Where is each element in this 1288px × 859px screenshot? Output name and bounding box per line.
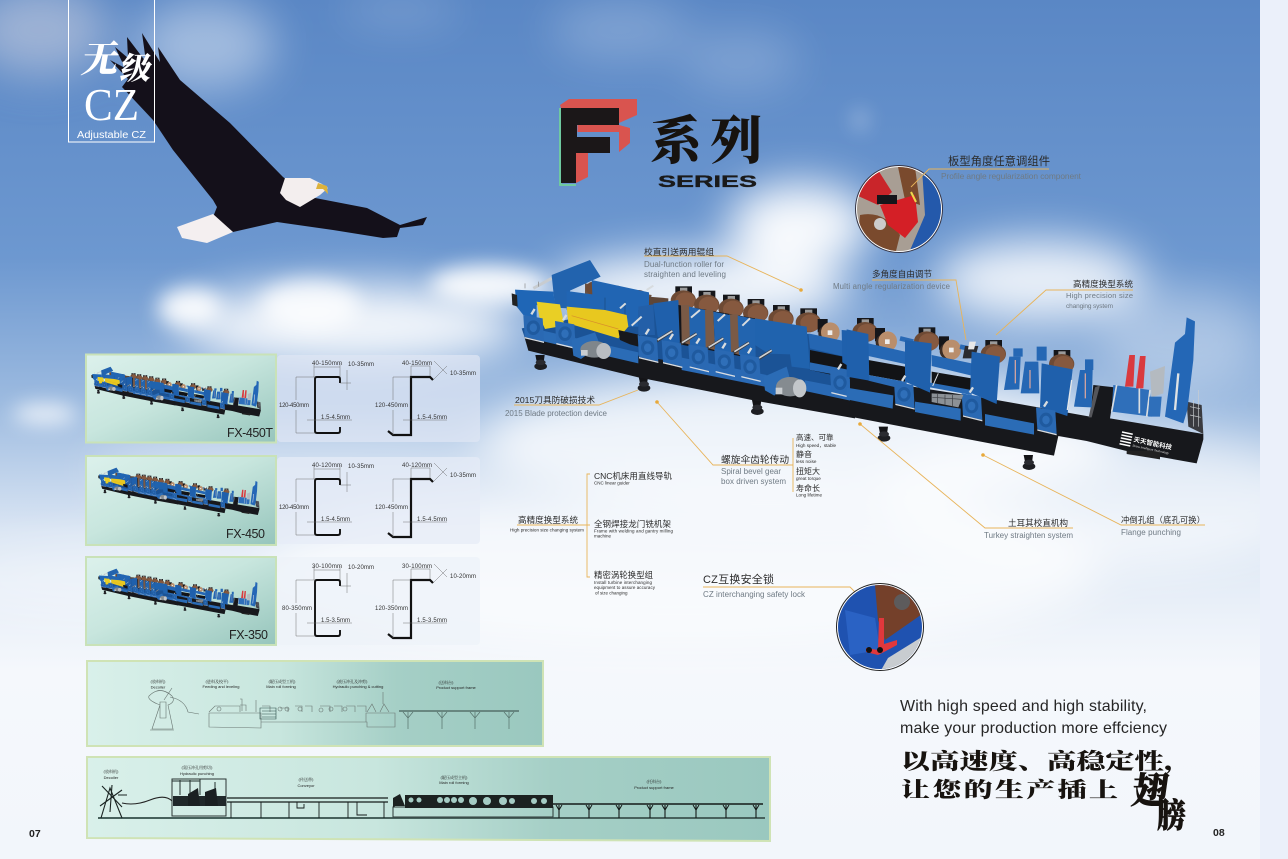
panel: FX-350 dimensions: 1.5-3.5mm — [417, 618, 447, 624]
series title: 系列 — [650, 113, 770, 171]
label: spiral bevel gear: Spiral bevel gear — [721, 467, 781, 476]
page number 07: 07 — [29, 828, 41, 840]
eagle beak — [316, 183, 328, 194]
label: blade protection: 2015刀具防破损技术 — [515, 394, 595, 405]
label: high precision size changing: changing system — [1066, 303, 1113, 310]
label tree: high precision system: 高精度换型系统 — [518, 515, 578, 525]
calligraphy wings: 膀 — [1157, 797, 1186, 835]
label tree: high precision system: machine — [594, 534, 612, 538]
panel: model FX-450 — [86, 456, 276, 545]
turbine group: 精密涡轮换型组 — [594, 570, 654, 580]
line captions: Conveyor — [297, 783, 315, 788]
panel: FX-450 dimensions: 120-450mm — [375, 505, 408, 511]
panel: FX-350 dimensions: 1.5-3.5mm — [321, 618, 350, 624]
panel: FX-350 dimensions — [277, 557, 480, 645]
line captions: Hydraulic punching — [180, 771, 214, 776]
label: dual function roller: 校直引送两用辊组 — [644, 246, 714, 257]
gear feature list: High speed，stable — [796, 443, 837, 449]
line captions: (托料台) — [647, 778, 662, 784]
inset: profile angle component — [855, 165, 945, 255]
layout captions — [151, 678, 477, 690]
label: flange punching: 冲倒孔组（底孔可换） — [1121, 515, 1205, 525]
ground line — [98, 817, 765, 819]
decoiler — [100, 785, 172, 818]
panel: FX-450T dimensions: 40-150mm — [312, 361, 342, 367]
panel: FX-350 dimensions: 10-20mm — [348, 565, 374, 571]
label: spiral bevel gear — [655, 400, 837, 498]
label: blade protection — [505, 390, 638, 418]
clouds — [0, 0, 1288, 650]
panel: FX-450 dimensions: 120-450mm — [279, 505, 309, 511]
machine brand: Shine Intelligent Technology — [1132, 444, 1170, 455]
line captions: (氮压冲孔用剪切) — [182, 764, 213, 770]
thumbnail machine — [91, 367, 261, 418]
CNC guide: CNC机床用直线导轨 — [594, 471, 672, 481]
panel: FX-450T dimensions: 120-450mm — [279, 403, 309, 409]
thumbnail machine — [98, 569, 259, 618]
layout captions: (辊压成型工机) — [269, 678, 296, 684]
model name: FX-450T — [227, 426, 273, 440]
label: multi angle device — [833, 269, 966, 340]
label: flange punching — [981, 453, 1205, 537]
label: flange punching: Flange punching — [1121, 528, 1181, 537]
label: CZ safety lock — [703, 572, 868, 605]
label: Turkey straighten system: 土耳其校直机构 — [1008, 518, 1068, 528]
calligraphy title: 级 — [118, 51, 155, 86]
panel: FX-350 dimensions: 120-350mm — [375, 606, 408, 612]
calligraphy title: 无 — [78, 39, 123, 81]
panel: FX-350 dimensions: 30-100mm — [402, 564, 432, 570]
gear feature list: 寿命长 — [796, 483, 820, 493]
forming line sketch — [209, 692, 395, 728]
eagle illustration — [110, 33, 427, 243]
label tree: high precision system: Install turbine interchanging — [594, 580, 652, 585]
roll forming mill — [393, 794, 553, 817]
slogan english: With high speed and high stability, — [900, 698, 1147, 715]
label tree: high precision system: CNC linear guider — [594, 480, 630, 486]
label: dual function roller: Dual-function roller for — [644, 260, 724, 269]
label: blade protection: 2015 Blade protection device — [505, 409, 608, 418]
calligraphy title — [78, 39, 155, 86]
eagle tail — [177, 214, 233, 243]
gear feature list: less noise — [796, 459, 817, 464]
label: dual function roller — [644, 246, 803, 292]
label tree: high precision system — [510, 471, 673, 596]
gear feature list: great torque — [796, 476, 821, 481]
gear feature list: 扭矩大 — [796, 466, 820, 476]
line captions: Main roll forming — [439, 780, 469, 785]
calligraphy wings: 翅 — [1129, 771, 1170, 811]
line captions: Product support frame — [634, 785, 675, 790]
label: high precision size changing: 高精度换型系统 — [1073, 279, 1133, 289]
panel: model FX-350 — [86, 557, 276, 645]
CZ heading: CZ — [84, 80, 139, 130]
panel: FX-450T dimensions: 120-450mm — [375, 403, 408, 409]
panel: FX-450T dimensions: 10-35mm — [348, 362, 374, 368]
subtitle: Adjustable CZ — [77, 130, 146, 141]
panel: production line layout, dark — [87, 757, 770, 841]
model name: FX-450 — [226, 527, 265, 541]
label tree: high precision system: equipment to assure accuracy — [594, 585, 656, 590]
layout captions: (进料及校平) — [206, 678, 229, 684]
panel: FX-450 dimensions: 10-35mm — [348, 464, 374, 470]
slogan chinese — [901, 748, 1193, 835]
machine brand: 天天智能科技 — [1133, 435, 1173, 452]
panel: FX-450 dimensions: 1.5-4.5mm — [417, 517, 447, 523]
line captions: (放料机) — [104, 768, 119, 774]
gear feature list: 静音 — [796, 449, 812, 459]
conveyor — [227, 798, 388, 818]
label: dual function roller: straighten and leveling — [644, 270, 726, 279]
title box: Adjustable CZ — [68, 0, 155, 142]
line captions — [104, 764, 675, 790]
model name: FX-350 — [229, 628, 268, 642]
layout captions: (液压冲孔及冲剪) — [337, 678, 368, 684]
label: Turkey straighten system: Turkey straighten system — [984, 531, 1073, 540]
panel: FX-450T dimensions: 40-150mm — [402, 361, 432, 367]
thumbnail machine — [98, 468, 259, 517]
series subtitle: SERIES — [658, 172, 757, 191]
slogan english: make your production more effciency — [900, 720, 1167, 737]
layout captions: (放料机) — [151, 678, 166, 684]
line captions: (传送带) — [299, 776, 314, 782]
line captions: (辊压成型主机) — [441, 774, 468, 780]
eagle head — [280, 178, 328, 207]
layout captions: (送料台) — [439, 679, 454, 685]
slogan chinese: 让您的生产插上 — [901, 778, 1118, 802]
gear feature list — [796, 432, 837, 498]
gear feature list: Long lifetime — [796, 492, 822, 498]
slogan english — [900, 698, 1167, 737]
F series logo — [559, 99, 770, 191]
layout captions: Feeding and leveling — [203, 684, 239, 689]
right page margin strip — [1260, 0, 1288, 859]
panel: FX-450T dimensions: 1.5-4.5mm — [417, 415, 447, 421]
label: multi angle device: Multi angle regularization device — [833, 282, 950, 291]
panel: FX-450 dimensions: 10-35mm — [450, 473, 476, 479]
page number 08: 08 — [1213, 827, 1225, 839]
label tree: high precision system: Frame with welding and gantry milling — [594, 528, 673, 534]
panel: FX-450T dimensions: 10-35mm — [450, 371, 476, 377]
inset: safety lock — [835, 583, 925, 673]
panel: FX-350 dimensions: 10-20mm — [450, 574, 476, 580]
panel: FX-450 dimensions: 1.5-4.5mm — [321, 517, 350, 523]
label: profile angle component: Profile angle regularization component — [941, 171, 1082, 181]
steel frame: 全钢焊接龙门铣机架 — [594, 519, 671, 529]
panel: model FX-450T — [86, 354, 276, 442]
layout captions: Decoiler — [151, 684, 166, 690]
label: high precision size changing — [996, 279, 1133, 335]
label tree: high precision system: High precision size changing system — [510, 528, 584, 532]
hydraulic punching unit — [172, 779, 226, 816]
label tree: high precision system: of size changing — [595, 590, 628, 596]
panel: FX-450T dimensions — [277, 355, 480, 442]
label: profile angle component: 板型角度任意调组件 — [948, 154, 1050, 168]
label: Turkey straighten system — [858, 422, 1073, 540]
label: CZ safety lock: CZ interchanging safety lock — [703, 590, 806, 599]
panel: FX-450 dimensions — [277, 457, 480, 544]
line captions: Decoiler — [104, 775, 119, 780]
gear feature list: 高速、可靠 — [796, 432, 834, 442]
layout captions: Hydraulic punching & cutting — [333, 684, 383, 689]
panel: FX-450 dimensions: 40-120mm — [402, 463, 432, 469]
label: spiral bevel gear: 螺旋伞齿轮传动 — [721, 453, 789, 466]
label: profile angle component — [911, 154, 1082, 187]
panel: FX-350 dimensions: 80-350mm — [282, 606, 312, 612]
calligraphy wings — [1129, 771, 1186, 835]
support frame sketch — [399, 711, 519, 729]
support frame — [553, 804, 763, 818]
layout captions: Product support frame — [436, 685, 477, 690]
main machine — [512, 260, 1203, 470]
label: high precision size changing: High precision size — [1066, 291, 1133, 300]
slogan chinese: 以高速度、高稳定性， — [901, 748, 1193, 775]
panel: FX-350 dimensions: 30-100mm — [312, 564, 342, 570]
decoiler sketch — [149, 688, 199, 730]
machine brand — [1119, 432, 1173, 456]
label: spiral bevel gear: box driven system — [721, 477, 786, 486]
panel: FX-450T dimensions: 1.5-4.5mm — [321, 415, 350, 421]
panel: FX-450 dimensions: 40-120mm — [312, 463, 342, 469]
panel: production line layout, light — [87, 661, 543, 746]
layout captions: Main roll forming — [266, 684, 296, 689]
label: multi angle device: 多角度自由调节 — [872, 269, 932, 279]
label: CZ safety lock: CZ互换安全锁 — [703, 572, 774, 586]
